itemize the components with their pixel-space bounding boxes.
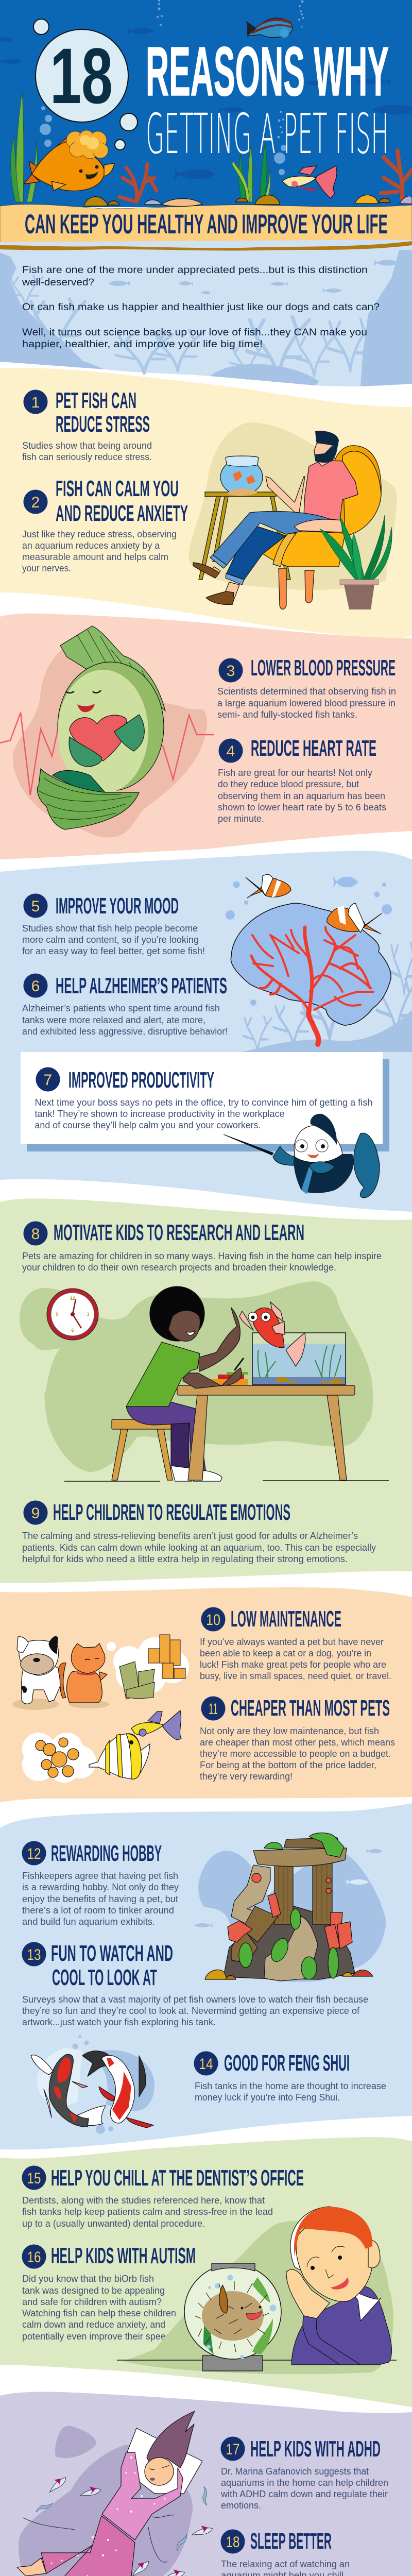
text 16: Watching fish can help these children [22,2308,176,2318]
text 16 [22,2274,178,2342]
light koi [82,2051,153,2128]
fish body [58,662,164,791]
text 3: Scientists determined that observing fish in [217,686,396,697]
text 13: they’re so fun and they’re cool to look at. Nevermind getting an expensive piece of [22,2006,360,2016]
ruin rocks [224,1905,355,1979]
purple guppy [131,1710,181,1740]
panel: reasons 8 and 9 [0,1198,412,1583]
badge 12: 12 [27,1845,41,1862]
badge 18 [220,2530,245,2553]
text 8: Pets are amazing for children in so many ways. Having fish in the home can help inspire [22,1251,382,1261]
badge 9: 9 [31,1505,40,1522]
text 3: a large aquarium lowered blood pressure in [217,698,396,708]
yellow butterfly fish [89,1734,150,1779]
text 12 [22,1871,179,1927]
dog [17,1636,61,1704]
fish fin [60,626,165,711]
child [126,1286,242,1406]
text 2: your nerves. [22,563,71,573]
text 17: emotions. [221,2500,261,2511]
neck and collar [350,2290,381,2321]
text 12: there’s a lot of room to tinker around [22,1905,174,1916]
heading 6: HELP ALZHEIMER’S PATIENTS [56,973,227,998]
badge 15: 15 [27,2170,41,2187]
text 17: with ADHD calm down and regulate their [220,2489,388,2499]
small fish [36,2478,213,2576]
man legs [193,512,342,604]
text 3 [217,686,396,720]
text 9 [22,1531,376,1564]
panel: reasons 12, 13, 14 [0,1803,412,2149]
thought cloud: money [107,1635,189,1699]
text 13: artwork...just watch your fish exploring his tank. [22,2017,216,2027]
illustration: girl sleeping with fish [17,2411,213,2576]
heading 2: FISH CAN CALM YOU [56,476,179,501]
title: 18 bubble [33,19,138,150]
text 16: Did you know that the biOrb fish [22,2274,154,2284]
bubbles [226,877,392,1006]
panel: reasons 12, 13, 14: REWARDING HOBBY [51,1841,162,1866]
dark koi [31,2054,106,2127]
text 15: up to a (usually unwanted) dental procedure. [22,2218,205,2229]
rocks [84,195,412,207]
text 4: Fish are great for our hearts! Not only [218,768,372,778]
illustration: man watching fishbowl [189,422,397,609]
text 11: they’re very rewarding! [200,1771,293,1782]
sand [0,205,412,248]
text 5: for an easy way to feel better, get some fish! [22,946,205,956]
text 1: fish can seriously reduce stress. [22,452,152,462]
heading 16: HELP KIDS WITH AUTISM [51,2243,196,2268]
badge 7: 7 [44,1072,52,1089]
text 7 [35,1097,373,1130]
text 16: tank was designed to be appealing [22,2285,165,2296]
pillow [121,2428,202,2494]
text 12: Fishkeepers agree that having pet fish [22,1871,178,1881]
icon: goldfish [24,130,114,191]
chair [252,446,381,609]
text 6 [22,1003,228,1037]
feet [17,2558,62,2576]
text 9: patients. Kids can calm down while looking at an aquarium, too. This can be especially [22,1543,376,1553]
badge 18: 18 [226,2534,240,2551]
text 2: Just like they reduce stress, observing [22,529,177,539]
panel: intro [0,240,412,386]
text 10: If you’ve always wanted a pet but have never [200,1637,384,1647]
text 17: Dr. Marina Gafanovich suggests that [221,2466,369,2477]
badge 11 [201,1696,226,1721]
text 4: per minute. [218,814,264,824]
clock: 9 [56,1312,59,1317]
text 10: busy, live in small spaces, need quiet, or travel. [200,1671,391,1681]
heading 2 [56,476,188,526]
sweater [291,2286,391,2365]
illustration: dog and cat [12,1635,189,1783]
text 13 [22,1994,368,2027]
face [145,2458,174,2485]
text 15 [22,2195,273,2229]
heading 13: FUN TO WATCH AND [51,1941,173,1966]
text 14: Fish tanks in the home are thought to increase [195,2081,386,2091]
intro text [22,265,380,350]
thought cloud: coins [22,1733,96,1783]
clock: 6 [71,1328,74,1333]
hands [286,2269,330,2321]
hair back [290,2207,332,2272]
text 6: tanks were more relaxed and alert, ate more, [22,1015,205,1025]
badge 14 [194,2052,218,2075]
text 15: Dentists, along with the studies referenced here, know that [22,2195,265,2206]
text 5: Studies show that fish help people become [22,923,198,934]
intro text: Or can fish make us happier and healthier just like our dogs and cats can? [22,302,380,313]
text 18 [221,2559,350,2576]
text 6: and exhibited less aggressive, disruptive behavior! [22,1026,228,1037]
callout box: reason 7: IMPROVED PRODUCTIVITY [68,1067,214,1093]
tan rocks [231,1865,318,1981]
pajama top [102,2452,183,2540]
badge 4 [218,739,243,762]
illustration: coral and clownfish [226,874,392,1044]
clock [47,1289,98,1340]
plant [320,515,392,609]
text 8: your children to do their own research projects and broaden their knowledge. [22,1262,336,1273]
badge 5 [24,893,47,918]
pajama pants [41,2516,135,2576]
badge 7 [36,1067,60,1091]
intro text: happier, healthier, and improve your life big time! [22,339,263,350]
badge 16 [22,2244,46,2269]
panel: header underwater scene [0,0,412,248]
badge 9 [24,1500,47,1525]
text 4 [218,768,386,824]
text 12: is a rewarding hobby. Not only do they [22,1882,179,1892]
text 13: Surveys show that a vast majority of pet fish owners love to watch their fish because [22,1994,368,2005]
cat [59,1643,107,1703]
pufferfish [195,2281,269,2352]
badge 3 [218,658,243,682]
text 10: luck! Fish make great pets for people who are [200,1659,386,1670]
badge 1 [24,389,47,414]
heading 1 [56,388,150,437]
panel: reasons 3 and 4 [0,614,412,859]
badge 10: 10 [206,1612,220,1629]
plants left [11,91,37,202]
text 9: helpful for kids who need a little extra help in regulating their strong emotions. [22,1554,348,1564]
text 4: observing them in an aquarium has been [218,791,385,801]
clock: 12 [70,1296,75,1301]
panel: reasons 5, 6, 7: IMPROVE YOUR MOOD [56,893,179,919]
text 15: fish tanks help keep patients calm and stress-free in the lead [22,2207,273,2217]
text 14: money luck if you’re into Feng Shui. [195,2092,340,2103]
text 4: do they reduce blood pressure, but [218,779,359,789]
badge 10 [201,1607,226,1631]
badge 2 [24,489,47,514]
man head [314,431,339,466]
foreground pebbles [205,1970,373,1979]
green moss [239,1909,338,1979]
badge 5: 5 [31,898,40,915]
fish face [66,690,101,712]
badge 13: 13 [27,1946,41,1963]
books [202,1372,248,1385]
badge 12 [22,1841,46,1865]
badge 11: 11 [209,1701,218,1718]
intro background shading [0,250,412,386]
text 11: are cheaper than most other pets, which means [200,1737,395,1748]
text 8 [22,1251,382,1273]
text 18: The relaxing act of watching an [221,2559,350,2569]
text 1 [22,440,152,462]
boy features [307,2246,349,2290]
badge 14: 14 [199,2056,213,2073]
text 17: aquariums in the home can help children [221,2478,388,2488]
ECG line [0,711,214,795]
badge 1: 1 [31,394,40,411]
text 16: calm down and reduce anxiety, and [22,2319,165,2330]
badge 16: 16 [27,2249,41,2266]
clownfish bottom [327,903,382,934]
text 11: For being at the bottom of the price ladder, [200,1760,376,1770]
legs [126,1401,222,1481]
arm [303,2316,360,2365]
badge 15 [22,2166,46,2190]
icon: guppy [282,166,337,198]
text 5: more calm and content, so if you’re looking [22,935,199,945]
text 2: an aquarium reduces anxiety by a [22,540,160,551]
coral right [381,150,412,201]
text 10 [200,1637,391,1681]
text 2: measurable amount and helps calm [22,552,168,562]
background coral silhouettes [242,943,412,1052]
panel: reasons 1 and 2: REDUCE STRESS [56,412,150,437]
heading 13 [51,1941,173,1990]
illustration: child high-fiving fish [20,1281,389,1481]
panel: reasons 10 and 11 [0,1587,412,1802]
illustration: boy with toothache and pufferfish [117,2207,397,2374]
hair [147,2411,195,2468]
intro text: Well, it turns out science backs up our love of fish...they CAN make you [22,327,367,338]
text 11 [200,1726,395,1782]
stool [112,1419,174,1480]
clownfish top [246,874,291,898]
text 16: and safe for children with autism? [22,2297,162,2307]
badge 6: 6 [31,978,40,995]
text 4: shown to lower heart rate by 5 to 6 beats [218,802,386,812]
red fish [239,1302,305,1366]
plants middle [232,143,270,202]
text 16: potentially even improve their speech. [22,2331,178,2342]
bubbles [40,0,304,175]
fins [37,715,144,829]
illustration: fish with heart [0,626,214,838]
table [177,1385,355,1480]
panel: reasons 17 and 18 [0,2392,412,2576]
badge 3: 3 [227,663,235,680]
text 5 [22,923,205,956]
hair [294,2207,372,2257]
pillars [232,1860,332,1963]
callout box: reason 7 [21,1052,389,1151]
text 1: Studies show that being around [22,440,152,451]
illustration: professor fish [224,1114,380,1198]
text 7: Next time your boss says no pets in the office, try to convince him of getting a fish [35,1097,373,1108]
text 12: enjoy the benefits of having a pet, but [22,1894,178,1904]
intro text: well-deserved? [22,277,94,288]
ruin top slab [253,1833,347,1867]
text 10: been able to keep a cat or a dog, you’re in [200,1648,371,1658]
title: 18 bubble: 18 [50,32,113,120]
man torso [304,460,358,520]
man arm [266,477,305,515]
heading 13: COOL TO LOOK AT [52,1965,157,1990]
heading 2: AND REDUCE ANXIETY [56,501,188,526]
intro text: Fish are one of the more under appreciated pets...but is this distinction [22,265,368,276]
illustration: aquarium ruins [194,1833,386,1982]
fishbowl [220,456,263,496]
badge 8 [24,1221,47,1246]
icon: striped fish [246,18,293,38]
fish tank [252,1333,346,1385]
text 6: Alzheimer’s patients who spent time around fish [22,1003,220,1013]
red tubes [228,1873,352,1950]
clock: 3 [87,1312,90,1317]
polka dots [50,2456,176,2576]
text 9: The calming and stress-relieving benefits aren’t just good for adults or Alzheimer’s [22,1531,358,1541]
badge 17: 17 [226,2441,240,2458]
illustration: koi pair [31,2035,154,2134]
badge 6 [24,974,47,997]
coral left [119,164,157,202]
sand bottom edge [0,241,412,250]
badge 8: 8 [31,1226,40,1243]
heart [70,715,126,761]
badge 13 [22,1942,46,1966]
text 7: and of course they’ll help calm you and your coworkers. [35,1120,261,1130]
heading 1: PET FISH CAN [56,388,136,413]
text 11: Not only are they low maintenance, but fish [200,1726,379,1736]
text 3: semi- and fully-stocked fish tanks. [217,709,357,720]
text 11: they’re more accessible to people on a budget. [200,1749,391,1759]
text 2 [22,529,177,573]
panel: reasons 15 and 16 [0,2137,412,2407]
table [199,492,290,580]
badge 17 [220,2437,245,2461]
bowl [184,2263,281,2371]
text 14 [195,2081,386,2103]
text 17 [220,2466,388,2511]
background fish silhouettes [0,28,412,179]
badge 2: 2 [31,494,40,511]
face [296,2223,373,2301]
badge 4: 4 [227,743,235,760]
panel: reasons 5, 6, 7 [0,851,412,1212]
text 12: and build fun aquarium exhibits. [22,1917,155,1927]
text 7: tank! They’re shown to increase productivity in the workplace [35,1109,284,1119]
